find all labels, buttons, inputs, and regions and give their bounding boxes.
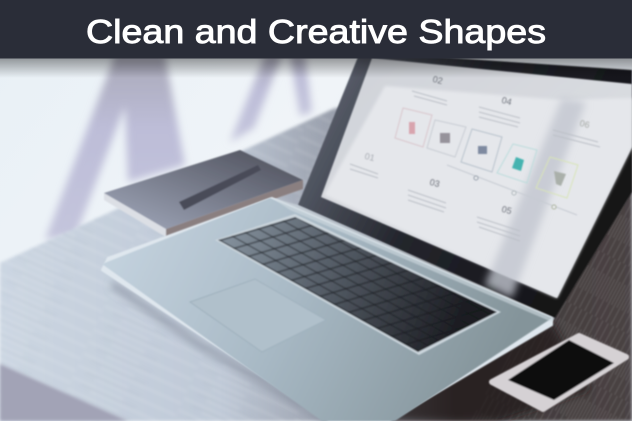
card 5 (536, 157, 578, 198)
card 4 (497, 144, 537, 183)
card 1 (395, 108, 432, 147)
table legs (45, 55, 312, 240)
step numbers (364, 74, 591, 216)
step numbers: 06 (579, 118, 591, 130)
pen (179, 165, 261, 210)
hinge strip (272, 198, 555, 322)
header shadow (0, 58, 632, 78)
title: Clean and Creative Shapes (86, 13, 546, 50)
step numbers: 02 (432, 74, 444, 86)
laptop display (321, 58, 632, 298)
corner object bottom left (0, 364, 128, 421)
laptop lid and bezel (298, 52, 632, 318)
notebook with pen (104, 150, 303, 237)
laptop base (102, 198, 555, 421)
card 3 (461, 129, 502, 172)
timeline (447, 165, 577, 215)
trackpad (190, 279, 326, 352)
step numbers: 04 (501, 95, 513, 107)
step numbers: 01 (364, 151, 376, 163)
laptop edge shadow on table (112, 284, 330, 421)
infographic on screen (350, 91, 600, 241)
smartphone (492, 336, 626, 409)
card 2 (427, 120, 466, 157)
title banner (0, 0, 632, 58)
card icons (409, 122, 566, 186)
wooden table top (0, 108, 632, 421)
keyboard (215, 214, 501, 355)
step numbers: 03 (429, 177, 441, 189)
window reflection streak (485, 98, 586, 298)
bright screen area (324, 86, 632, 298)
step numbers: 05 (501, 204, 513, 216)
description lines (350, 91, 600, 241)
